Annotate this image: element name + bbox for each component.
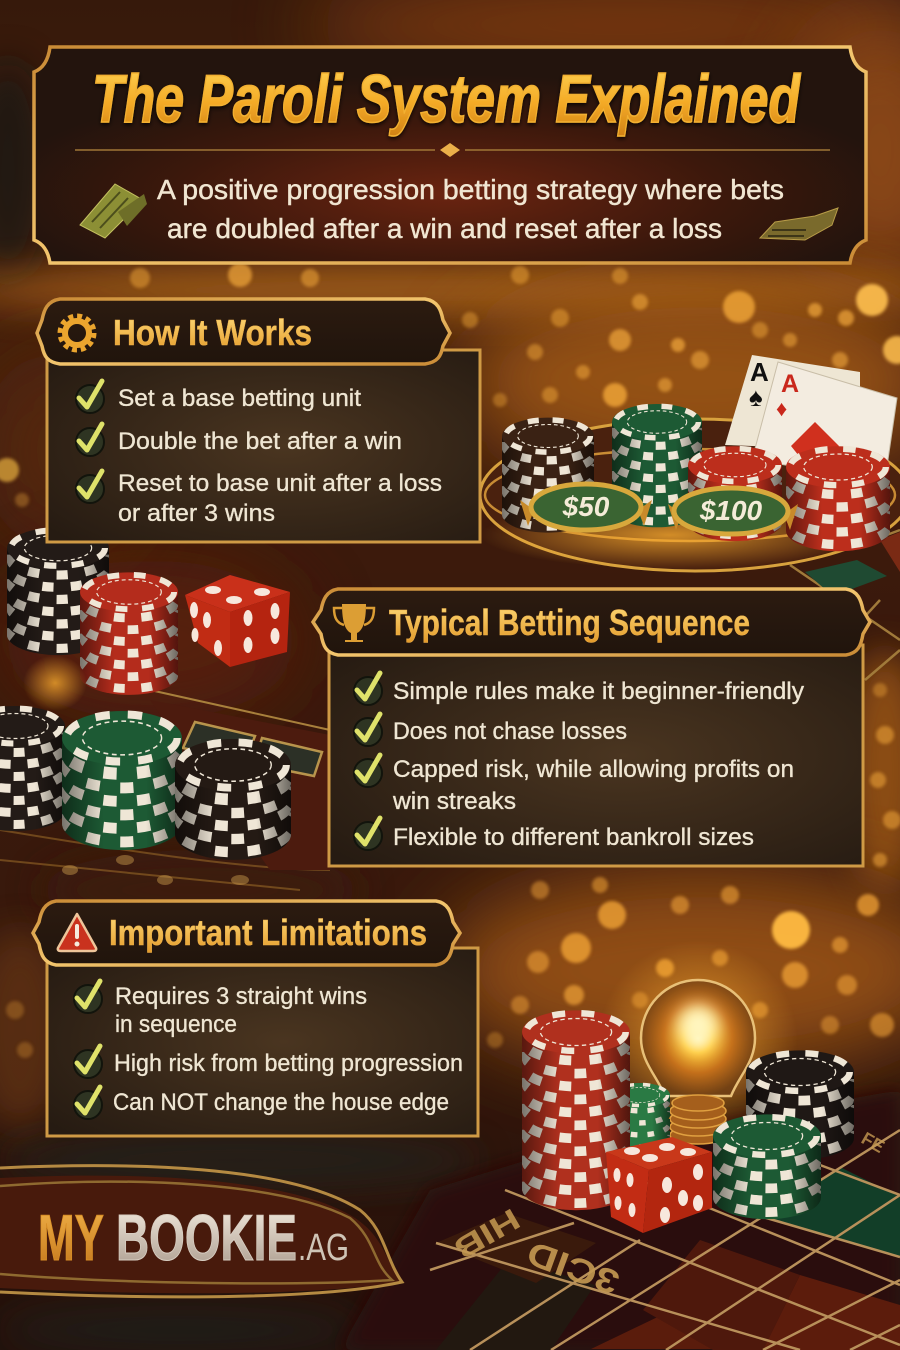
playing cards [725,355,897,480]
playing cards: A [750,357,769,387]
roulette table bottom [340,1090,900,1350]
chip stack: red left [80,572,178,695]
red die upper [185,575,290,667]
roulette table upper right [480,419,900,680]
panel: how it works [37,299,480,542]
item list: typical betting sequence: Does not chase losses [393,718,627,745]
candle glow [23,655,87,711]
bokeh lights lower [6,877,894,1058]
heading pill: typical betting sequence [313,589,870,655]
item list: important limitations: in sequence [115,1011,237,1038]
logo [38,1201,349,1274]
chip stack: black lower left [0,706,65,831]
heading pill: important limitations [33,901,460,965]
chip stack: black top left [7,528,109,655]
item list: how it works [76,381,442,527]
chip stack: red right [786,446,890,551]
roulette table bottom: 3CID [522,1233,624,1301]
panel: typical betting sequence [313,589,870,866]
heading pill: how it works [37,299,450,364]
title divider [75,143,830,157]
icon: gear [60,316,94,350]
roulette table bottom: FE [858,1128,888,1157]
item list: typical betting sequence: Capped risk, while allowing profits on [393,756,794,783]
roulette table bottom: HIB [448,1201,525,1265]
chip stack: red centre [688,446,782,541]
bokeh lights upper [0,263,900,867]
icon: warning [58,914,96,951]
item list: how it works: Set a base betting unit [118,385,361,412]
item list: typical betting sequence [354,673,805,851]
item list: how it works: Reset to base unit after a loss [118,470,442,497]
item list: important limitations: Can NOT change the house edge [113,1089,449,1116]
chip stack: green [612,404,702,527]
logo: .AG [298,1227,349,1269]
item list: typical betting sequence: Simple rules make it beginner-friendly [393,678,805,705]
panel: important limitations [33,901,478,1136]
item list: important limitations: Requires 3 straight wins [115,983,367,1010]
chip stack: brown [502,418,594,533]
item list: how it works: or after 3 wins [118,500,275,527]
badge: $100 [668,488,798,534]
item list: important limitations: High risk from betting progression [114,1050,463,1077]
badge: $100: $100 [699,495,763,526]
logo: BOOKIE [116,1201,297,1274]
icon: trophy [334,604,374,642]
chip stack: green right [713,1114,821,1219]
playing cards: ♠ [749,382,763,412]
logo plaque [0,1166,402,1297]
subtitle: A positive progression betting strategy where bets [157,174,784,205]
light bulb [598,940,798,1144]
item list: typical betting sequence: win streaks [392,788,516,815]
icon: cash left [80,184,147,238]
heading pill: typical betting sequence: Typical Betting Sequence [389,602,750,643]
subtitle [157,174,784,244]
item list: important limitations [74,981,463,1119]
red die lower [606,1137,712,1233]
icon: cash right [760,208,838,240]
chip stack: red tall [522,1010,630,1210]
item list: how it works: Double the bet after a win [118,428,402,455]
chip stack: green lower [62,711,182,850]
badge: $50: $50 [562,491,610,522]
heading pill: important limitations: Important Limitations [109,912,427,953]
playing cards: ♦ [776,396,787,421]
subtitle: are doubled after a win and reset after a loss [167,213,722,244]
badge: $50 [520,484,652,530]
chip stack: green behind [610,1083,670,1151]
playing cards: A [781,370,799,398]
chip stack: black lower centre [175,739,291,860]
logo: MY [38,1201,104,1274]
heading pill: how it works: How It Works [113,312,312,353]
felt table middle left [0,690,330,890]
title panel [34,47,866,263]
chip stack: black right [746,1050,854,1159]
item list: typical betting sequence: Flexible to different bankroll sizes [393,824,754,851]
